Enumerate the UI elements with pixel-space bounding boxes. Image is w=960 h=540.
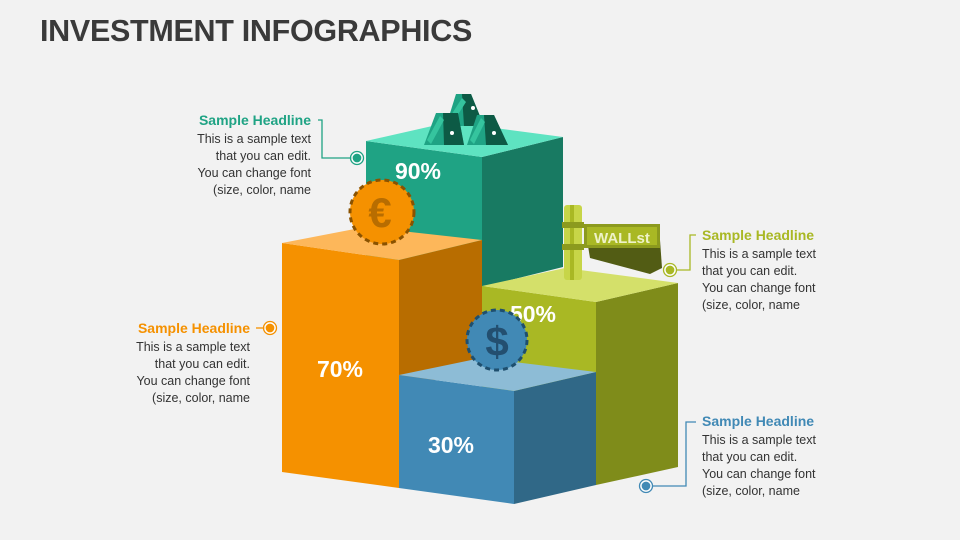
- text block: green: [702, 227, 816, 312]
- box: teal 90%: 90%: [395, 158, 441, 184]
- text block: green: that you can edit.: [702, 264, 797, 278]
- text block: teal: This is a sample text: [197, 132, 311, 146]
- text block: blue: You can change font: [702, 467, 816, 481]
- icon: gold bars: [424, 94, 508, 145]
- box: green 50%: [482, 268, 678, 485]
- text block: teal: [197, 112, 311, 197]
- box: teal 90%: [366, 122, 563, 300]
- text block: orange: You can change font: [136, 374, 250, 388]
- text block: blue: (size, color, name: [702, 484, 800, 498]
- text block: orange: Sample Headline: [138, 320, 250, 336]
- connectors: [256, 120, 696, 492]
- text block: blue: that you can edit.: [702, 450, 797, 464]
- text block: teal: You can change font: [197, 166, 311, 180]
- text block: green: This is a sample text: [702, 247, 816, 261]
- box: orange 70%: 70%: [317, 356, 363, 382]
- text block: orange: [136, 320, 250, 405]
- icon: dollar coin: [467, 310, 527, 370]
- icon: wall street sign: [562, 205, 662, 280]
- box: green 50%: 50%: [510, 301, 556, 327]
- box: blue 30%: 30%: [428, 432, 474, 458]
- text block: green: You can change font: [702, 281, 816, 295]
- text block: blue: [702, 413, 816, 498]
- text block: teal: Sample Headline: [199, 112, 311, 128]
- text block: orange: This is a sample text: [136, 340, 250, 354]
- box: orange 70%: [282, 227, 482, 488]
- text block: blue: Sample Headline: [702, 413, 814, 429]
- text block: green: (size, color, name: [702, 298, 800, 312]
- icon: euro coin: [350, 180, 414, 244]
- text block: orange: (size, color, name: [152, 391, 250, 405]
- text block: blue: This is a sample text: [702, 433, 816, 447]
- text block: green: Sample Headline: [702, 227, 814, 243]
- text block: teal: that you can edit.: [216, 149, 311, 163]
- icon: dollar coin: $: [485, 318, 509, 365]
- box: blue 30%: [399, 358, 596, 504]
- icon: wall street sign: WALLst: [594, 230, 650, 247]
- title: INVESTMENT INFOGRAPHICS: [40, 14, 472, 48]
- text block: orange: that you can edit.: [155, 357, 250, 371]
- text block: teal: (size, color, name: [213, 183, 311, 197]
- icon: euro coin: €: [368, 189, 392, 236]
